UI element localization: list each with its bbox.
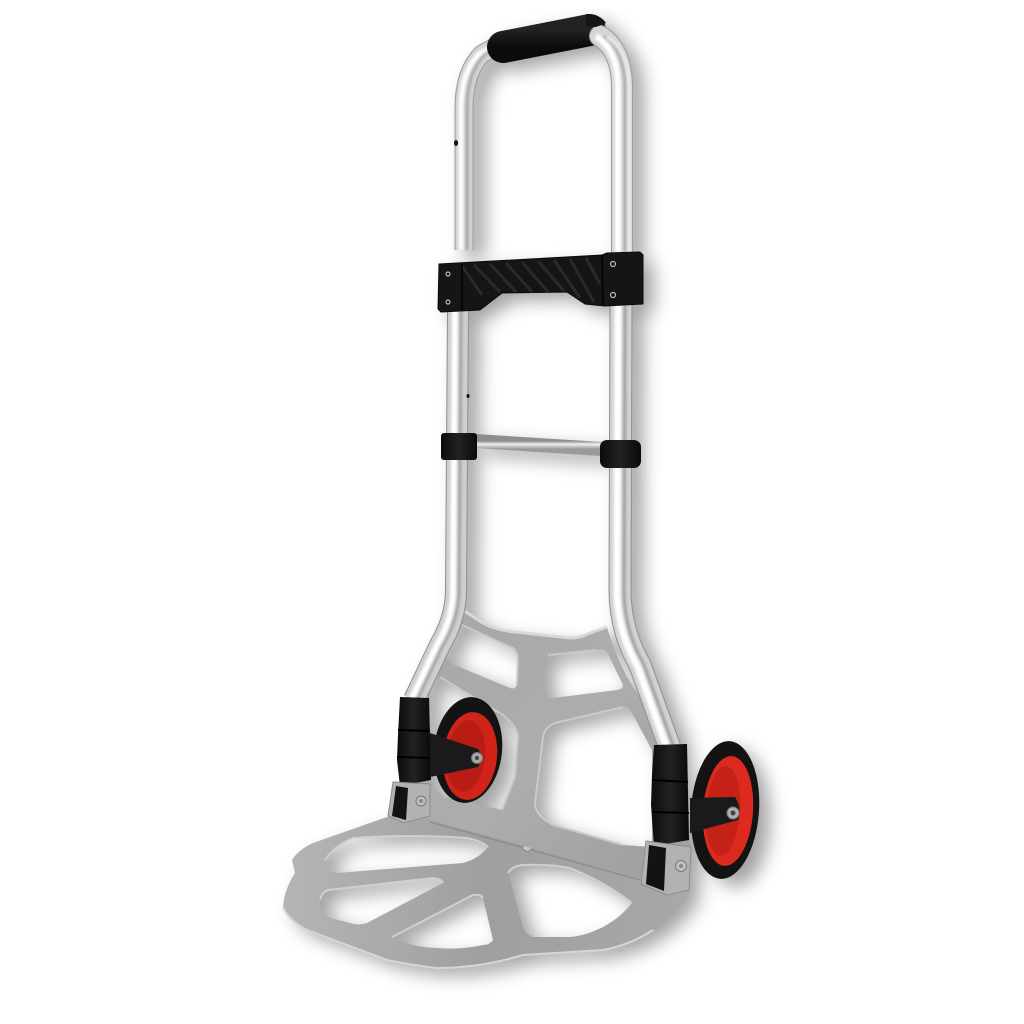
middle black bracket — [438, 252, 643, 312]
frame plate — [398, 607, 690, 890]
upper right tube — [596, 36, 629, 253]
bracket ribbed texture — [462, 258, 600, 302]
left foot bracket — [388, 782, 430, 823]
soft drop shadow — [294, 38, 770, 976]
left pivot block — [397, 697, 482, 786]
left wheel — [429, 694, 507, 806]
lower right tube — [617, 305, 674, 748]
lower left tube — [411, 310, 461, 700]
adjustment holes — [454, 140, 470, 398]
footplate centre notch — [522, 836, 538, 852]
top foam grip — [503, 30, 590, 47]
left wheel arm — [430, 733, 481, 777]
right wheel — [686, 739, 764, 881]
right wheel arm — [690, 797, 739, 833]
footplate — [283, 817, 690, 968]
right clamp — [600, 440, 641, 468]
grip top edge over tube — [586, 14, 606, 27]
bracket rivets — [446, 262, 616, 304]
cross bar with clamps — [441, 433, 641, 468]
right pivot block — [651, 744, 739, 846]
upper left tube — [461, 44, 503, 250]
footplate rim highlight — [283, 907, 653, 968]
right hub — [727, 807, 739, 819]
left hub — [472, 752, 482, 764]
left clamp — [441, 433, 477, 460]
right foot bracket — [641, 841, 691, 895]
